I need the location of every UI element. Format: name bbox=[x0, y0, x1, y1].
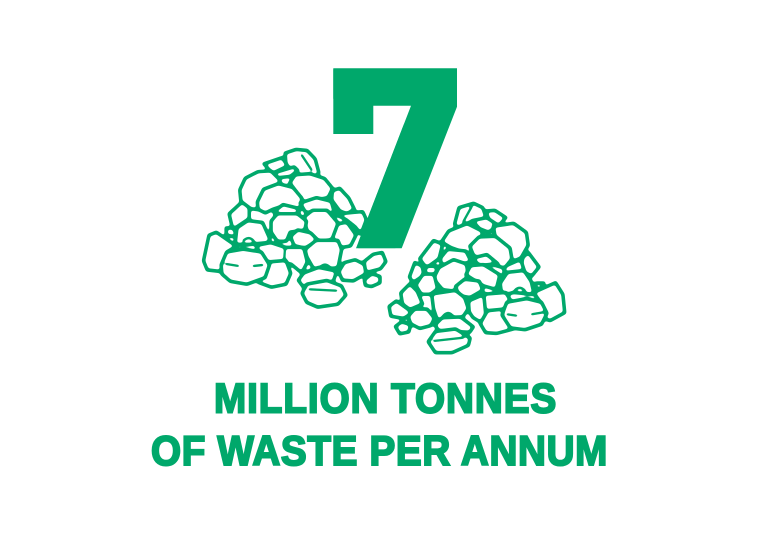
icon: left waste pile bbox=[180, 133, 400, 320]
number 7: 7 bbox=[321, 14, 466, 304]
icon: right waste pile bbox=[373, 188, 573, 362]
caption: of waste per annum: OF WASTE PER ANNUM bbox=[151, 427, 607, 474]
infographic bbox=[152, 68, 606, 466]
caption: million tonnes: MILLION TONNES bbox=[214, 374, 556, 422]
